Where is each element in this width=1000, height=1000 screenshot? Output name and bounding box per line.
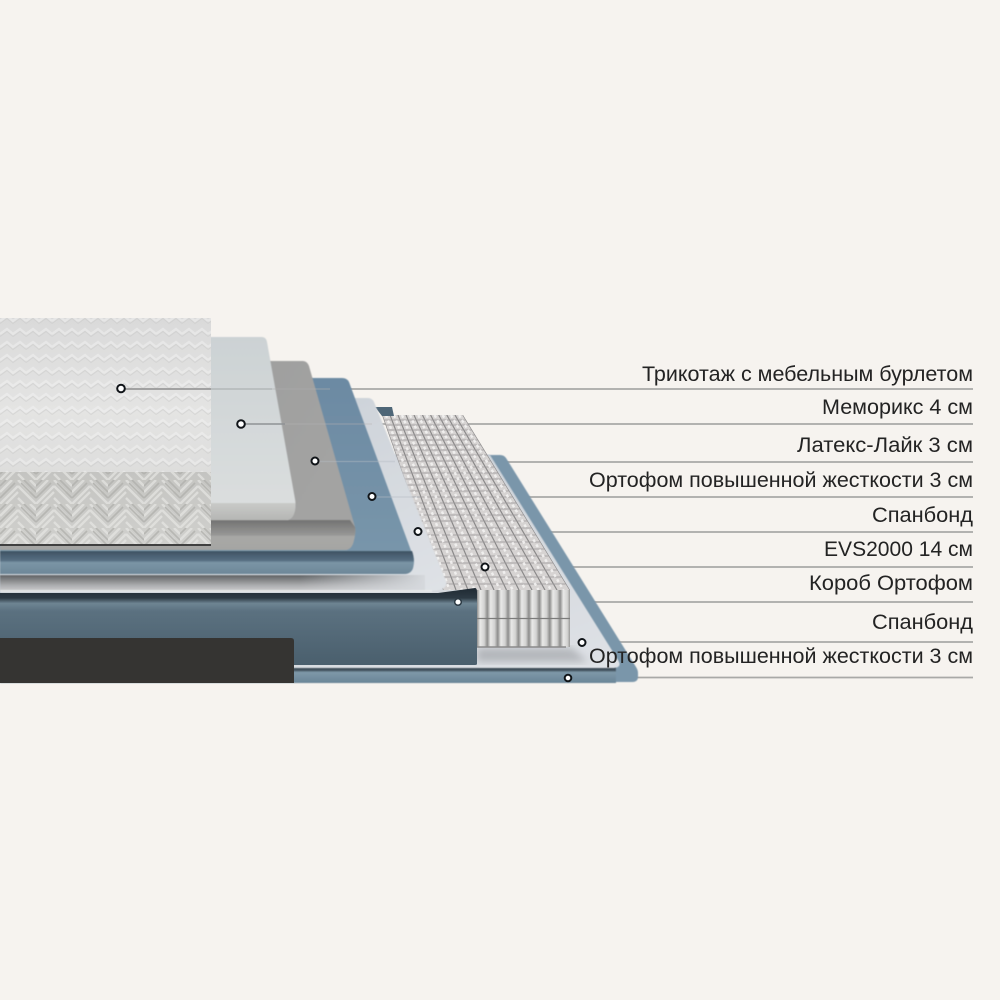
labels — [589, 362, 973, 668]
panel: EVS2000 spring block — [380, 414, 572, 647]
spring block front columns — [477, 590, 570, 647]
labels: Латекс-Лайк 3 см — [797, 433, 973, 457]
knit front side — [0, 472, 211, 544]
overlay leader lines — [121, 389, 420, 497]
knit top surface — [0, 318, 211, 473]
panel: black side label — [0, 638, 294, 683]
panel: Memorix layer — [0, 337, 296, 520]
knit bottom edge — [0, 544, 211, 546]
labels: Ортофом повышенной жесткости 3 см — [589, 468, 973, 492]
panel: Latex-Like layer — [0, 361, 355, 550]
panel: upper spanbond — [0, 398, 446, 592]
labels: EVS2000 14 см — [824, 537, 973, 561]
labels: Трикотаж с мебельным бурлетом — [642, 362, 973, 386]
labels: Спанбонд — [872, 610, 973, 634]
panel: Ortofom box back corner — [375, 407, 394, 416]
panel: bottom Ortofom plate — [0, 455, 638, 683]
labels: Короб Ортофом — [809, 571, 973, 595]
labels: Меморикс 4 см — [822, 395, 973, 419]
spring block top surface — [380, 414, 572, 592]
panel: bottom spanbond — [0, 455, 620, 668]
leader lines — [330, 389, 973, 678]
shadow under spring block — [477, 648, 588, 662]
labels: Спанбонд — [872, 503, 973, 527]
panel: top knit layer — [0, 318, 211, 545]
markers — [117, 385, 585, 681]
panel: Ortofom box — [0, 588, 477, 665]
panel: upper Ortofom plate — [0, 378, 414, 574]
labels: Ортофом повышенной жесткости 3 см — [589, 644, 973, 668]
